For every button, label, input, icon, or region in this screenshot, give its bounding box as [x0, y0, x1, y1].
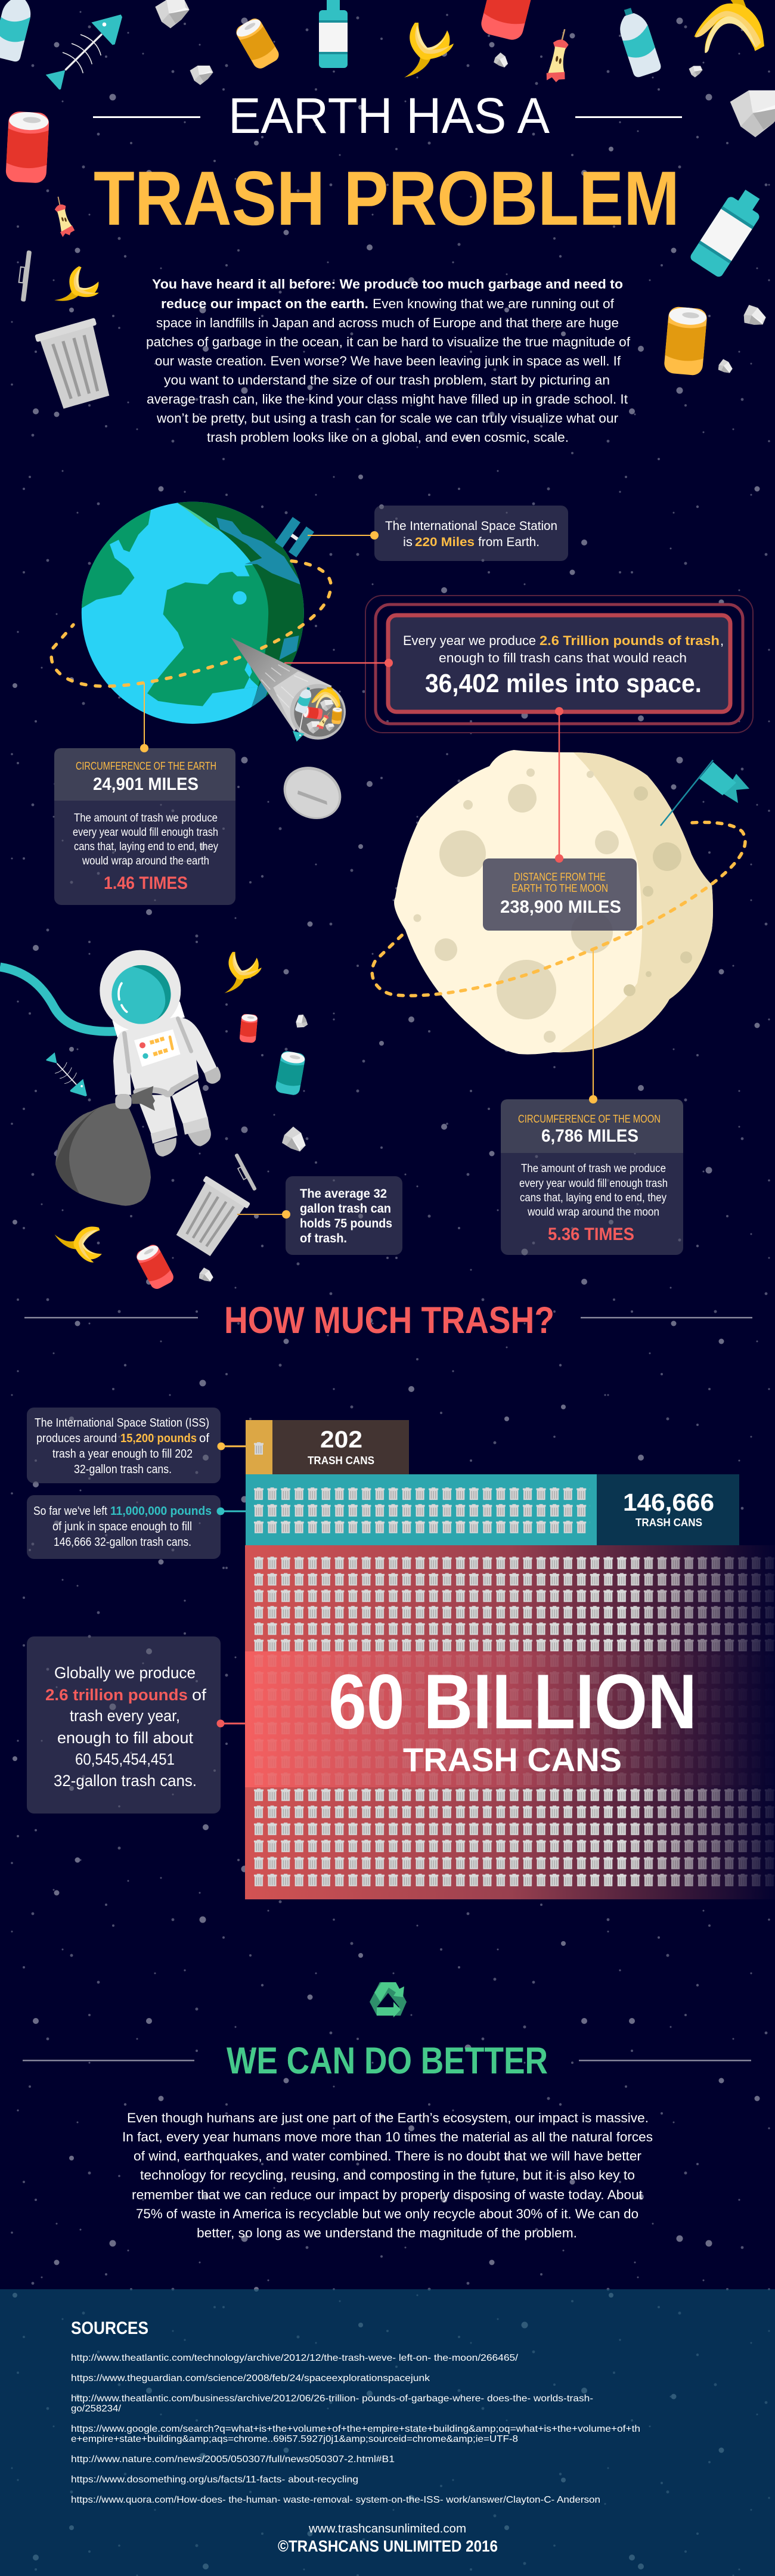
- panel text: of: [199, 1432, 209, 1445]
- right arm: [177, 1018, 216, 1074]
- panel paragraph: [519, 1163, 668, 1219]
- connector line: [237, 1214, 286, 1215]
- suit back: [112, 1002, 185, 1037]
- callout: global trash: [27, 1636, 246, 1814]
- band background: [0, 2289, 775, 2576]
- panel box: [27, 1636, 221, 1814]
- callout: ISS trash: [27, 1408, 246, 1483]
- intro text block: you want to understand the size of our trash problem, start by picturing an: [164, 373, 610, 388]
- chart block: 60 billion trash cans: [245, 1545, 775, 1899]
- connector line: [221, 1723, 246, 1724]
- icon: paper ball top: [155, 0, 190, 28]
- connector line: [593, 950, 594, 1099]
- panel text: 60,545,454,451: [75, 1750, 175, 1768]
- icon: glass bottle center: [319, 0, 348, 68]
- panel body: [501, 1099, 683, 1255]
- callout text: 2.6 Trillion pounds of trash: [540, 633, 720, 648]
- closing paragraph: Even though humans are just one part of the Earth’s ecosystem, our impact is massive.: [127, 2110, 649, 2125]
- red middle area: [245, 1651, 775, 1787]
- title rule right: [575, 116, 682, 118]
- icon: crumpled paper: [278, 1125, 307, 1156]
- panel result: 1.46 TIMES: [104, 873, 188, 893]
- left arm: [113, 1031, 131, 1095]
- closing paragraph: technology for recycling, reusing, and composting in the future, but it is also key to: [140, 2168, 635, 2183]
- title rule left: [93, 116, 200, 118]
- icon: broken handle: [17, 250, 32, 302]
- callout text: 36,402 miles into space.: [425, 669, 702, 698]
- heading rule right: [581, 1317, 752, 1319]
- icon: red can top: [479, 0, 538, 42]
- icon: red can lower: [134, 1242, 176, 1291]
- right glove: [204, 1067, 221, 1084]
- icon: small rock: [190, 66, 213, 85]
- panel text: 146,666 32-gallon trash cans.: [54, 1536, 191, 1549]
- icon: space station: [275, 517, 314, 557]
- middle ring: [376, 605, 743, 724]
- icon: orange can: [234, 16, 281, 71]
- panel text: Globally we produce: [54, 1664, 196, 1682]
- callout: junk in space: [27, 1495, 246, 1559]
- shadow side craters: [624, 786, 692, 996]
- panel paragraph: every year would fill enough trash: [73, 826, 218, 839]
- title line one: EARTH HAS A: [228, 88, 550, 144]
- panel box: [388, 615, 730, 712]
- panel label: CIRCUMFERENCE OF THE EARTH: [76, 760, 216, 772]
- callout text: enough to fill trash cans that would reach: [439, 650, 687, 665]
- right leg: [172, 1081, 207, 1124]
- chart block: 202 trash cans: [246, 1420, 409, 1474]
- icon: apple core left: [49, 195, 76, 238]
- callout: 2.6 trillion pounds: [284, 596, 753, 733]
- panel text: 11,000,000 pounds: [110, 1505, 212, 1518]
- panel text: produces around: [36, 1432, 117, 1445]
- panel text: The average 32: [300, 1187, 387, 1201]
- floating trash around the title: [0, 0, 775, 411]
- panel text: 32-gallon trash cans.: [74, 1463, 172, 1476]
- callout text: is: [403, 535, 413, 549]
- connector dot left: [385, 659, 393, 667]
- panel figure: 24,901 MILES: [93, 774, 199, 794]
- panel box: [27, 1408, 221, 1483]
- panel figure: 238,900 MILES: [500, 897, 621, 917]
- visor shade: [132, 965, 171, 1020]
- panel header: [501, 1099, 683, 1153]
- heading text: HOW MUCH TRASH?: [224, 1300, 554, 1341]
- title: [93, 88, 682, 241]
- icon: tilted bottle: [689, 184, 768, 278]
- left cuff: [151, 1127, 178, 1143]
- connector dot: [282, 1210, 290, 1219]
- icon: banana peel: [404, 23, 454, 78]
- connector dot bottom: [555, 854, 563, 863]
- panel box: [374, 506, 568, 561]
- sources list: https://www.google.com/search?q=what+is+the+volume+of+the+empire+state+building&amp;oq=what+is+the+volume+of+th: [71, 2424, 640, 2434]
- connector line: [559, 712, 560, 858]
- moon shadow side: [559, 752, 713, 1053]
- chest panel: [134, 1030, 181, 1067]
- closing paragraph: [122, 2110, 653, 2240]
- tube highlights: [261, 665, 308, 708]
- panel paragraph: cans that, laying end to end, they: [74, 841, 218, 853]
- panel text: of trash.: [300, 1232, 347, 1245]
- value: 202: [320, 1427, 362, 1453]
- intro text block: won’t be pretty, but using a trash can for scale we can truly visualize what our: [156, 411, 618, 426]
- icon: small rock lower right: [715, 358, 734, 377]
- panel text: [35, 1416, 209, 1476]
- red upper area: [245, 1545, 775, 1651]
- website: www.trashcansunlimited.com: [308, 2522, 466, 2535]
- callout text: 220 Miles: [415, 535, 475, 549]
- icon: water bottle top left: [0, 0, 36, 63]
- left arm strip: [125, 1033, 129, 1071]
- illustration: moon: [394, 750, 713, 1055]
- icon: large paper ball: [730, 91, 775, 137]
- icon: apple core: [545, 27, 572, 83]
- intro text block: average trash can, like the kind your class might have filled up in grade school. It: [147, 392, 628, 407]
- icon: banana left: [54, 263, 106, 316]
- panel text: trash a year enough to fill 202: [52, 1447, 193, 1461]
- panel label: DISTANCE FROM THE: [514, 871, 606, 883]
- panel paragraph: The amount of trash we produce: [521, 1163, 666, 1175]
- panel paragraph: The amount of trash we produce: [74, 812, 218, 824]
- icon: big banana peel: [695, 0, 764, 53]
- heading rule right: [579, 2060, 751, 2062]
- panel box: [483, 858, 637, 931]
- panel text: of junk in space enough to fill: [52, 1520, 192, 1533]
- tube cone: [231, 637, 332, 731]
- icon: small red can: [239, 1013, 258, 1043]
- icon: banana: [224, 952, 262, 993]
- panel paragraph: would wrap around the moon: [527, 1206, 659, 1219]
- icon: water bottle right: [614, 5, 662, 79]
- panel text: trash every year,: [70, 1707, 180, 1725]
- panel result: 5.36 TIMES: [548, 1225, 634, 1244]
- connector line: [221, 1445, 246, 1447]
- sources list: http://www.theatlantic.com/business/archive/2012/06/26-trillion- pounds-of-garbage-where- does-the- worlds-trash-: [71, 2394, 593, 2404]
- sources list: https://www.theguardian.com/science/2008/feb/24/spaceexplorationspacejunk: [71, 2373, 430, 2383]
- panel header: [54, 748, 235, 801]
- orbit around earth: [51, 561, 331, 686]
- dark label: [597, 1474, 739, 1545]
- chart block: 146,666 trash cans: [246, 1474, 739, 1545]
- icon: trash can: [171, 1176, 250, 1260]
- sources list: https://www.quora.com/How-does- the-human- waste-removal- system-on-the-ISS- work/answer/Clayton-C- Anderson: [71, 2495, 600, 2505]
- sources heading: SOURCES: [71, 2318, 148, 2338]
- connector dot top: [555, 707, 563, 715]
- teal area: [246, 1474, 597, 1545]
- heading rule left: [23, 2060, 194, 2062]
- can icon: [254, 1442, 264, 1455]
- intro text block: trash problem looks like on a global, and even cosmic, scale.: [207, 430, 569, 445]
- connector to earth: [284, 662, 389, 664]
- panel text: [33, 1505, 212, 1549]
- left glove: [115, 1094, 132, 1109]
- icon: orange can right: [664, 306, 708, 376]
- orbit around moon: [372, 822, 745, 996]
- panel text: 2.6 trillion pounds: [45, 1686, 188, 1704]
- heading rule left: [24, 1317, 198, 1319]
- can grid: [254, 1487, 590, 1535]
- callout text: from Earth.: [478, 535, 540, 549]
- illustration: astronaut tether: [0, 967, 116, 1031]
- icon: fish bones: [46, 14, 122, 89]
- closing paragraph: remember that we can reduce our impact by properly disposing of waste today. About: [132, 2187, 643, 2202]
- panel: distance to the moon: [483, 707, 637, 931]
- unit: TRASH CANS: [308, 1455, 374, 1467]
- panel: circumference of the earth: [54, 683, 235, 905]
- panel paragraph: every year would fill enough trash: [519, 1177, 668, 1190]
- intro text block: space in landfills in Japan and across much of Europe and that there are huge: [156, 315, 619, 330]
- illustration: garbage bag: [55, 1103, 151, 1206]
- connector dot: [217, 1507, 224, 1515]
- panel text: enough to fill about: [57, 1729, 193, 1747]
- callout: ISS distance: [308, 506, 568, 561]
- visor: [111, 965, 170, 1024]
- panel paragraph: would wrap around the earth: [82, 855, 209, 867]
- sources list: e+empire+state+building&amp;aqs=chrome..69i57.5927j0j1&amp;sourceid=chrome&amp;ie=UTF-8: [71, 2434, 518, 2444]
- can grids: [254, 1557, 775, 1887]
- panel text: So far we've left: [33, 1505, 107, 1518]
- panel paragraph: cans that, laying end to end, they: [520, 1192, 666, 1204]
- outer ring: [365, 596, 753, 733]
- intro text block: [146, 277, 631, 445]
- floating trash around the astronaut: [45, 952, 311, 1291]
- icon: recycle symbol: [370, 1982, 407, 2017]
- big number: 60 BILLION: [328, 1658, 697, 1745]
- icon: trash can lid: [274, 757, 351, 829]
- icon: rock right: [737, 302, 768, 333]
- tube end section: [273, 671, 332, 731]
- right boot: [188, 1128, 211, 1146]
- callout text: The International Space Station: [385, 519, 557, 533]
- callout text: Every year we produce: [403, 633, 536, 648]
- icon: fish bones: [45, 1052, 88, 1096]
- panel text: [45, 1664, 207, 1790]
- tube inside: [294, 688, 344, 737]
- moon surface: [394, 750, 713, 1055]
- heading text: WE CAN DO BETTER: [227, 2040, 548, 2082]
- waist strip: [136, 1077, 196, 1094]
- value: 146,666: [623, 1489, 714, 1516]
- visor highlights: [119, 983, 127, 1012]
- panel body: [54, 748, 235, 905]
- connector dot: [589, 1095, 597, 1103]
- sources list: https://www.dosomething.org/us/facts/11-facts- about-recycling: [71, 2475, 358, 2485]
- icon: teal can: [275, 1050, 306, 1096]
- icon: small rock: [294, 1013, 311, 1031]
- connector line: [221, 1511, 246, 1512]
- panel: circumference of the moon: [501, 950, 683, 1255]
- intro text block: patches of garbage in the ocean, it can be hard to visualize the true magnitude of: [146, 334, 631, 349]
- intro text block: Even knowing that we are running out of: [373, 296, 615, 311]
- sources list: http://www.theatlantic.com/technology/archive/2012/12/the-trash-weve- left-on- the-moon/266465/: [71, 2353, 519, 2363]
- sources list: go/258234/: [71, 2404, 122, 2414]
- brown label: [272, 1420, 409, 1474]
- left boot: [154, 1137, 176, 1157]
- callout text: [403, 633, 724, 698]
- red lower area: [245, 1787, 775, 1899]
- icon: broken handle: [231, 1153, 257, 1193]
- panel text: gallon trash can: [300, 1202, 391, 1216]
- panel paragraph: [73, 812, 218, 867]
- icon: trash can: [35, 318, 116, 411]
- panel text: 32-gallon trash cans.: [54, 1772, 197, 1790]
- callout text: [385, 519, 557, 549]
- right cuff: [183, 1117, 210, 1134]
- torso: [122, 1016, 199, 1095]
- connector line: [308, 535, 374, 536]
- panel text: holds 75 pounds: [300, 1217, 392, 1230]
- sources list: [71, 2353, 640, 2505]
- unit: TRASH CANS: [636, 1517, 702, 1529]
- sources footer band: [0, 2289, 775, 2576]
- big unit: TRASH CANS: [403, 1741, 622, 1778]
- right arm strip: [178, 1018, 191, 1051]
- illustration: astronaut: [100, 950, 221, 1157]
- moon craters: [414, 768, 619, 1043]
- icon: flag on the moon: [661, 760, 749, 826]
- closing paragraph: of wind, earthquakes, and water combined. There is no doubt that we will have better: [134, 2149, 641, 2163]
- panel text: [300, 1187, 392, 1245]
- callout text: ,: [720, 633, 724, 648]
- icon: banana lower: [55, 1220, 110, 1272]
- panel figure: 6,786 MILES: [541, 1126, 638, 1146]
- connector dot: [140, 744, 148, 752]
- icon: small rock top: [491, 51, 509, 70]
- panel text: of: [192, 1686, 207, 1704]
- orange square: [246, 1420, 272, 1474]
- intro text block: You have heard it all before: We produce too much garbage and need to: [152, 277, 623, 292]
- connector dot: [370, 531, 379, 540]
- copyright: ©TRASHCANS UNLIMITED 2016: [278, 2537, 498, 2555]
- connector dot: [217, 1719, 224, 1728]
- title line two: TRASH PROBLEM: [94, 156, 680, 241]
- panel label: CIRCUMFERENCE OF THE MOON: [518, 1113, 661, 1125]
- left leg: [136, 1095, 176, 1134]
- panel label line two: EARTH TO THE MOON: [512, 882, 608, 894]
- panel: average trash can: [237, 1176, 402, 1255]
- intro text block: our waste creation. Even worse? We have been leaving junk in space as well. If: [155, 354, 621, 368]
- icon: red can left: [5, 111, 49, 184]
- panel text: 15,200 pounds: [120, 1432, 197, 1445]
- bag knot: [131, 1086, 155, 1111]
- intro text block: reduce our impact on the earth.: [161, 296, 368, 311]
- closing paragraph: 75% of waste in America is recyclable but we only recycle about 30% of it. We can do: [136, 2206, 638, 2221]
- connector dot: [217, 1443, 225, 1450]
- closing paragraph: In fact, every year humans move more than 10 times the material as all the natural forces: [122, 2129, 653, 2144]
- illustration: trash-filled comet tube: [231, 637, 346, 742]
- connector line: [144, 683, 145, 748]
- icon: small rock lower: [196, 1266, 215, 1286]
- trash in tube: [293, 686, 342, 742]
- panel box: [27, 1495, 221, 1559]
- closing paragraph: better, so long as we understand the magnitude of the problem.: [197, 2225, 577, 2240]
- illustration: earth: [81, 502, 304, 724]
- helmet: [100, 950, 181, 1031]
- sources list: http://www.nature.com/news/2005/050307/full/news050307-2.html#B1: [71, 2454, 395, 2465]
- tube rim: [290, 684, 346, 740]
- panel box: [286, 1176, 402, 1255]
- icon: tiny rock right: [689, 66, 702, 78]
- panel text: The International Space Station (ISS): [35, 1416, 209, 1430]
